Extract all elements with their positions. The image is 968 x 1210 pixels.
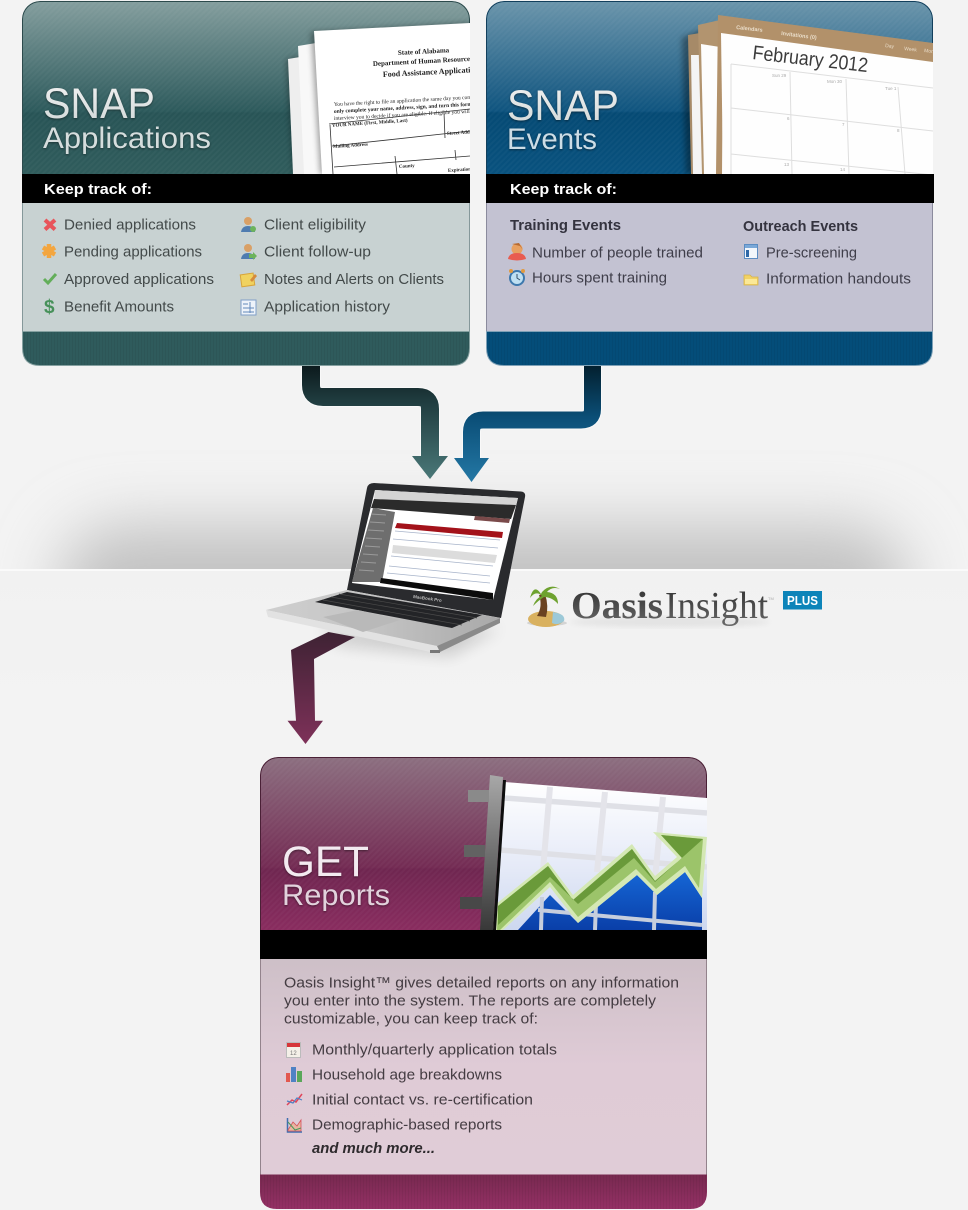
laptop shadow [320,628,500,656]
panel: GET Reports [260,757,707,1209]
list: outreach events [743,218,911,288]
body [486,200,932,332]
icon: line chart [287,1094,302,1105]
laptop [266,483,525,656]
footer [22,332,470,366]
list: training events: Number of people trained [532,244,703,262]
illustration: application forms [286,23,480,174]
arrow: events to laptop [454,366,592,482]
icon: alarm clock [509,269,525,285]
list: client items: Application history [264,298,391,316]
illustration: application forms: interview you to decide if you are eligible. If eligible you will [334,108,470,122]
header background [22,1,470,174]
list: client items [240,216,444,316]
icon: people trained [508,243,526,260]
logo: Oasis Insight PLUS [527,585,822,627]
icon: application history [241,300,256,315]
icon: approved check [44,274,56,283]
horizon shadow band [38,496,930,569]
body [22,200,470,332]
badge: PLUS: PLUS [787,593,818,608]
arrow: applications to laptop [311,366,448,479]
list: status items: Benefit Amounts [64,298,174,316]
logo: Oasis Insight PLUS: Insight [665,585,768,627]
header background [260,757,707,930]
sheet [494,782,707,930]
list: status items: Denied applications [64,216,196,234]
heading: GET [282,838,369,886]
illustration: calendars: 13 [784,162,790,167]
illustration: application forms: Mailing Address [333,143,368,150]
illustration: calendars: Month [924,48,938,56]
illustration: calendars: Mon 30 [827,79,843,84]
illustration: calendars: Week [904,46,918,54]
illustration: application forms: State of Alabama [398,46,450,57]
header background [486,1,933,174]
heading: SNAP [507,82,619,130]
list: client items: Client eligibility [264,216,367,234]
list: status items: Approved applications [64,271,214,288]
trackpad [323,610,400,632]
illustration: application forms: Expiration [448,167,471,174]
black bar [486,174,934,203]
heading: SNAP [43,80,155,128]
panel: SNAP Applications [22,1,480,366]
heading: Events [507,123,597,156]
keyboard [315,592,482,628]
list: report types: Household age breakdowns [312,1066,502,1084]
screen [352,490,518,600]
icon: notes [240,273,257,287]
list: training events: Training Events [510,217,621,234]
list: report types: Demographic-based reports [312,1116,502,1134]
illustration: calendars: 7 [842,122,845,127]
icon: folder [744,275,758,285]
list: status items [43,216,214,318]
heading [282,838,390,912]
illustration: application forms: Street Address [447,130,478,137]
binder [493,780,506,930]
illustration: calendars [682,15,938,175]
icon: pre-screening window [744,244,758,258]
illustration: calendars: Sun 29 [772,73,787,78]
black bar [22,174,470,203]
text block: intro: you enter into the system. The reports are completely [284,992,657,1010]
illustration: application forms: Food Assistance Application [383,65,480,79]
laptop: MacBook Pro [413,594,442,603]
illustration: calendars: Day [885,43,895,50]
list: report types [286,1042,557,1157]
illustration: application forms: Department of Human Resources [373,55,473,68]
text block: intro: customizable, you can keep track of: [284,1010,538,1028]
icon: palm island [527,587,567,627]
icon: calendar [286,1042,300,1058]
illustration: application forms: County [399,164,415,170]
icon: bar chart [286,1067,302,1082]
text block: intro: Oasis Insight™ gives detailed reports on any information [284,974,679,992]
black bar: Keep track of: [44,181,152,198]
icon: dollar sign: $ [44,297,55,318]
base deck [266,590,500,646]
sidebar rows [359,514,386,571]
text: and much more: and much more... [312,1140,435,1157]
illustration: calendars: February 2012 [751,42,869,77]
icon: pending asterisk [43,244,55,258]
list: client items: Client follow-up [264,244,371,260]
icon: calendar: 12 [290,1051,297,1057]
heading [43,80,211,155]
list: training events: Hours spent training [532,270,667,286]
text block: intro [284,974,679,1028]
illustration: calendars: 14 [840,167,846,172]
list: report types: Monthly/quarterly application totals [312,1042,557,1058]
icon: denied cross [45,220,55,230]
icon: client eligibility [241,217,256,232]
footer [486,332,932,366]
illustration: calendars: 6 [787,116,790,121]
green arrow [493,832,707,930]
lid [347,483,525,618]
list: report types: Initial contact vs. re-certification [312,1092,533,1108]
footer [260,1174,707,1209]
list: outreach events: Information handouts [766,270,911,288]
illustration: application forms: You have the right to file an application the same day you come [334,94,475,108]
list: outreach events: Pre-screening [766,244,857,262]
black bar: Keep track of: [510,181,617,198]
illustration: rising chart [460,775,707,930]
illustration: calendars: 8 [897,128,900,133]
black bar [260,930,707,959]
list: outreach events: Outreach Events [743,218,858,235]
list: client items: Notes and Alerts on Clients [264,271,444,288]
heading [507,82,619,156]
logo: Oasis Insight PLUS: TM [768,596,774,601]
arrow: laptop to reports [288,632,355,744]
illustration: application forms: YOUR NAME (First, Middle, Last) [332,119,408,129]
heading: Reports [282,879,390,912]
icon: area chart [288,1118,302,1132]
illustration: application forms: only complete your name, address, sign, and turn this form [334,102,473,115]
icon: client follow-up [241,244,257,260]
heading: Applications [43,122,211,155]
illustration: calendars: Tue 1 [885,86,897,91]
body [260,956,706,1175]
list: training events [508,217,703,286]
panel: SNAP Events [486,1,938,366]
blue area [518,872,702,930]
illustration: calendars: Invitations (0) [781,31,817,41]
logo: Oasis Insight PLUS: Oasis [571,585,663,627]
list: status items: Pending applications [64,244,202,260]
illustration: calendars: Calendars [736,25,763,34]
